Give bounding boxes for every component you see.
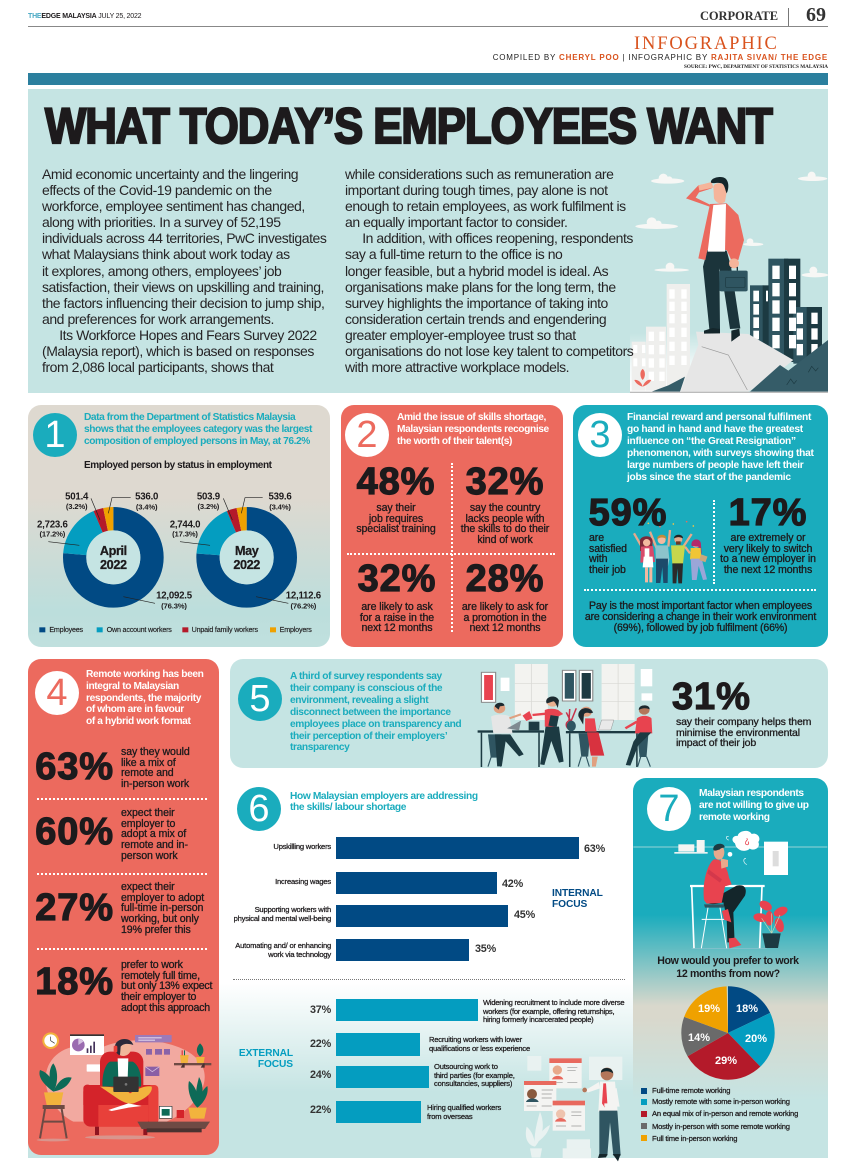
intro text column 2: organisations do not lose key talent to competitors bbox=[345, 343, 633, 359]
stat 48% text: job requires bbox=[369, 513, 423, 525]
bar: supporting workers bbox=[336, 905, 508, 927]
intro text column 2: greater employer-employee trust so that bbox=[345, 327, 576, 343]
panel 5 heading: disconnect between the importance bbox=[290, 707, 451, 718]
number badge 4: 4 bbox=[46, 672, 68, 714]
pie chart: 18% bbox=[736, 1003, 758, 1015]
intro text column 2: In addition, with offices reopening, respondents bbox=[362, 230, 633, 246]
pie legend: Mostly in-person with some remote working bbox=[652, 1122, 790, 1131]
donut charts with labels and legend: (17.3%) bbox=[172, 530, 198, 539]
intro text column 2: consideration certain trends and engendering bbox=[345, 311, 606, 327]
intro text column 1: from 2,086 local participants, shows that bbox=[42, 359, 273, 375]
panel 2: skills shortage bbox=[341, 405, 563, 647]
donut charts with labels and legend: (3.4%) bbox=[269, 503, 291, 512]
panel 7 heading: are not willing to give up bbox=[699, 800, 809, 811]
panel 1: employment status bbox=[28, 405, 330, 647]
bar: increasing wages bbox=[336, 872, 497, 894]
donut charts with labels and legend: 503.9 bbox=[197, 491, 221, 502]
bar: overseas bbox=[336, 1101, 421, 1123]
pie chart bbox=[681, 986, 775, 1080]
label: external focus bbox=[239, 1048, 293, 1070]
panel 4 heading: integral to Malaysian bbox=[86, 681, 179, 692]
label: internal focus: INTERNAL bbox=[552, 888, 603, 899]
legend bbox=[39, 626, 312, 634]
panel 5 heading bbox=[290, 671, 461, 753]
illustration: man thinking on stool bbox=[633, 830, 828, 948]
stat 59% text bbox=[588, 532, 627, 576]
intro text column 2: survey highlights the importance of taking into bbox=[345, 295, 608, 311]
stat 63% text: say they would bbox=[121, 746, 190, 758]
number badge 4 bbox=[35, 671, 79, 715]
stat 17% text: the next 12 months bbox=[724, 564, 812, 576]
stat 31% text: minimise the environmental bbox=[676, 727, 800, 739]
bar chart: internal focus: 45% bbox=[514, 909, 535, 921]
stat 48% text: specialist training bbox=[356, 523, 436, 535]
stat: 63%: 63% bbox=[35, 746, 114, 788]
intro text column 2: organisations make plans for the long term, the bbox=[345, 279, 616, 295]
stat: 31%: 31% bbox=[672, 676, 751, 718]
panel 5 heading: their company is conscious of the bbox=[290, 683, 442, 694]
stat 32% raise text bbox=[360, 601, 434, 634]
intro text column 1: it explores, among others, employees’ job bbox=[42, 263, 281, 279]
stat 27% text: full-time in-person bbox=[121, 902, 203, 914]
stat 17% text: very likely to switch bbox=[724, 543, 812, 555]
donut charts with labels and legend bbox=[37, 491, 322, 634]
panel 3 heading: Financial reward and personal fulfilment bbox=[627, 412, 811, 423]
donut charts with labels and legend: 2022 bbox=[233, 558, 260, 572]
bar chart: external focus: 22% bbox=[310, 1104, 331, 1116]
stat 60% text: expect their bbox=[121, 807, 175, 819]
stat 48% text bbox=[356, 502, 436, 535]
intro text column 1: satisfaction, their views on upskilling and training, bbox=[42, 279, 324, 295]
panel 3 heading: phenomenon, with surveys showing that bbox=[627, 448, 814, 459]
stat 28% text: are likely to ask for bbox=[462, 601, 548, 613]
stat 59% text: their job bbox=[589, 564, 626, 576]
stat 27% text: expect their bbox=[121, 881, 175, 893]
donut charts with labels and legend: 2022 bbox=[100, 558, 127, 572]
panel 4: remote working bbox=[28, 659, 219, 1155]
masthead: publication line: THEEDGE MALAYSIA JULY 25, 2022 bbox=[28, 13, 141, 20]
title: WHAT TODAY’S EMPLOYEES WANT bbox=[45, 98, 772, 154]
illustration: cheering colleagues bbox=[633, 520, 708, 584]
label: internal focus bbox=[552, 888, 603, 910]
stat 31% text: impact of their job bbox=[676, 737, 756, 749]
panel 3 heading: large numbers of people have left their bbox=[627, 460, 803, 471]
stat 18% text bbox=[121, 959, 212, 1014]
legend: Own account workers bbox=[107, 626, 172, 634]
stat 17% text: to a new employer in bbox=[720, 553, 816, 565]
bar chart: external focus: 24% bbox=[310, 1069, 331, 1081]
panel 6 heading bbox=[290, 791, 478, 813]
stat 63% text: in-person work bbox=[121, 778, 189, 790]
stat 28% text: next 12 months bbox=[469, 622, 541, 634]
panel 7 question: How would you prefer to work bbox=[657, 955, 799, 967]
stat 31% text: say their company helps them bbox=[676, 716, 811, 728]
credits line: COMPILED BY CHERYL POO | INFOGRAPHIC BY RAJITA SIVAN/ THE EDGE bbox=[493, 53, 828, 62]
stat 32% raise text: for a raise in the bbox=[360, 612, 434, 624]
panel 1 heading bbox=[84, 412, 312, 447]
donut charts with labels and legend: 12,112.6 bbox=[286, 590, 322, 601]
intro text column 1: Amid economic uncertainty and the lingering bbox=[42, 166, 298, 182]
panel 4 heading: Remote working has been bbox=[86, 669, 204, 680]
stat 32% raise text: next 12 months bbox=[361, 622, 433, 634]
illustration: office team at desks bbox=[478, 664, 652, 767]
stat 32% country text: lacks people with bbox=[466, 513, 544, 525]
donut charts with labels and legend: 536.0 bbox=[135, 491, 158, 502]
panel 2 heading: the worth of their talent(s) bbox=[397, 436, 512, 447]
intro text column 1: (Malaysia report), which is based on responses bbox=[42, 343, 314, 359]
chart subtitle: Employed person by status in employment bbox=[84, 460, 272, 471]
stat 32% country text: say the country bbox=[470, 502, 540, 514]
panel 7 heading: remote working bbox=[699, 812, 770, 823]
intro text column 1: effects of the Covid-19 pandemic on the bbox=[42, 182, 272, 198]
bar chart: internal focus: 42% bbox=[502, 878, 523, 890]
panel 3 heading bbox=[626, 412, 814, 483]
bar chart: internal focus: work via technology bbox=[268, 950, 331, 959]
donut charts with labels and legend: (3.4%) bbox=[136, 503, 158, 512]
illustration: businessman on a rock overlooking city bbox=[630, 172, 828, 393]
panel 3 footer text: are considering a change in their work environment bbox=[585, 611, 816, 623]
bar chart: internal focus: 35% bbox=[475, 943, 496, 955]
number badge 5 bbox=[238, 677, 282, 721]
panel 2 heading: Amid the issue of skills shortage, bbox=[397, 412, 546, 423]
stat: 48%: 48% bbox=[357, 461, 435, 503]
pie legend bbox=[641, 1086, 798, 1143]
bar: automating bbox=[336, 939, 469, 961]
number badge 6 bbox=[237, 787, 281, 831]
bar chart: external focus: Outsourcing work to bbox=[434, 1062, 498, 1071]
panel 3 footer text bbox=[585, 600, 816, 634]
donut charts with labels and legend: April bbox=[100, 544, 127, 558]
bar chart: external focus: third parties (for example, bbox=[434, 1071, 515, 1080]
panel 2 heading: Malaysian respondents recognise bbox=[397, 424, 549, 435]
number badge 2 bbox=[345, 413, 389, 457]
stat 27% text: employer to adopt bbox=[121, 892, 204, 904]
intro text column 2: longer feasible, but a hybrid model is ideal. As bbox=[345, 263, 608, 279]
panel: background gradient behind lower section bbox=[28, 770, 828, 1158]
stat 32% country text: the skills to do their bbox=[461, 523, 549, 535]
stat 63% text: remote and bbox=[121, 767, 174, 779]
pie legend: An equal mix of in-person and remote working bbox=[652, 1109, 798, 1118]
label: internal focus: FOCUS bbox=[552, 899, 587, 910]
donut: May 2022 bbox=[208, 519, 285, 596]
intro text column 1: the factors influencing their decision to jump ship, bbox=[42, 295, 324, 311]
donut charts with labels and legend: 2,723.6 bbox=[37, 519, 68, 530]
number badge 2: 2 bbox=[356, 414, 378, 456]
bar: outsourcing bbox=[336, 1066, 429, 1088]
stat: 59%: 59% bbox=[589, 492, 667, 534]
intro text column 2: enough to retain employees, as work fulfilment is bbox=[345, 198, 626, 214]
bar chart: internal focus: Supporting workers with bbox=[255, 905, 331, 914]
bar chart: internal focus: Automating and/ or enhancing bbox=[235, 941, 331, 950]
stat 59% text: with bbox=[589, 553, 607, 565]
intro text column 1: along with priorities. In a survey of 52,195 bbox=[42, 214, 281, 230]
stat 27% text bbox=[120, 881, 204, 936]
pie legend: Full-time remote working bbox=[652, 1086, 730, 1095]
stat 59% text: satisfied bbox=[589, 543, 627, 555]
stat 17% text bbox=[720, 532, 816, 576]
source line: SOURCE: PWC, DEPARTMENT OF STATISTICS MALAYSIA bbox=[684, 64, 828, 70]
panel 5 heading: their perception of their employers’ bbox=[290, 731, 447, 742]
panel 4 heading: respondents, the majority bbox=[86, 693, 201, 704]
panel 3 heading: go hand in hand and have the greatest bbox=[627, 424, 803, 435]
intro text column 2: say a full-time return to the office is no bbox=[345, 246, 562, 262]
panel 3: great resignation bbox=[573, 405, 828, 647]
stat: 32% raise: 32% bbox=[358, 558, 436, 600]
bar chart: external focus: workers (for example, offering returnships, bbox=[483, 1007, 614, 1016]
intro text column 1: Its Workforce Hopes and Fears Survey 2022 bbox=[59, 327, 317, 343]
bar chart: internal focus: physical and mental well-being bbox=[234, 914, 331, 923]
panel 3 footer text: Pay is the most important factor when employees bbox=[589, 600, 812, 612]
legend: Unpaid family workers bbox=[192, 626, 258, 634]
number badge 3: 3 bbox=[589, 414, 611, 456]
intro text column 2 bbox=[345, 166, 634, 375]
stat 60% text: adopt a mix of bbox=[121, 828, 186, 840]
bar: widening recruitment bbox=[336, 999, 478, 1021]
stat 18% text: but only 13% expect bbox=[121, 980, 212, 992]
panel 3 heading: influence on “the Great Resignation” bbox=[627, 436, 796, 447]
panel 6 heading: the skills/ labour shortage bbox=[290, 802, 406, 813]
intro text column 1: what Malaysians think about work today as bbox=[42, 246, 290, 262]
stat 18% text: prefer to work bbox=[121, 959, 183, 971]
panel 5 heading: environment, revealing a slight bbox=[290, 695, 428, 706]
panel 6 heading: How Malaysian employers are addressing bbox=[290, 791, 478, 802]
pie legend: Full time in-person working bbox=[652, 1134, 737, 1143]
panel 1 heading: shows that the employees category was the largest bbox=[84, 424, 312, 435]
donut charts with labels and legend: (76.2%) bbox=[291, 602, 317, 611]
bar chart: external focus: consultancies, suppliers) bbox=[434, 1079, 512, 1088]
intro text column 1: workforce, employee sentiment has changed, bbox=[42, 198, 305, 214]
bar chart: internal focus: 63% bbox=[584, 843, 605, 855]
teal header bar bbox=[28, 73, 828, 85]
bar chart: external focus: Widening recruitment to include more diverse bbox=[483, 998, 624, 1007]
stat 60% text: employer to bbox=[121, 818, 175, 830]
stat 63% text: like a mix of bbox=[121, 757, 176, 769]
bar chart: internal focus: Increasing wages bbox=[275, 877, 331, 886]
donut charts with labels and legend: (17.2%) bbox=[40, 530, 66, 539]
pie chart: 14% bbox=[688, 1032, 710, 1044]
stat 60% text: person work bbox=[121, 850, 178, 862]
donut: April 2022 bbox=[75, 519, 152, 596]
panel 5 heading: transparency bbox=[290, 742, 349, 753]
stat 17% text: are extremely or bbox=[731, 532, 805, 544]
donut charts with labels and legend: (76.3%) bbox=[161, 602, 187, 611]
panel 7 question: 12 months from now? bbox=[676, 968, 780, 980]
stat: 28%: 28% bbox=[466, 558, 544, 600]
stat 32% raise text: are likely to ask bbox=[361, 601, 433, 613]
bar: upskilling workers bbox=[336, 837, 579, 859]
donut charts with labels and legend: 12,092.5 bbox=[156, 590, 193, 601]
panel 2 heading bbox=[397, 412, 549, 447]
stat 59% text: are bbox=[589, 532, 604, 544]
donut charts with labels and legend: 539.6 bbox=[268, 491, 292, 502]
pie chart: 29% bbox=[715, 1055, 737, 1067]
panel 7 heading bbox=[699, 788, 809, 823]
label: external focus: EXTERNAL bbox=[239, 1048, 293, 1059]
stat 31% text bbox=[676, 716, 811, 749]
donut charts with labels and legend: (3.2%) bbox=[66, 502, 88, 511]
intro text column 1: individuals across 44 territories, PwC investigates bbox=[42, 230, 326, 246]
stat 60% text: remote and in- bbox=[121, 839, 188, 851]
intro text column 1 bbox=[42, 166, 326, 375]
intro text column 2: important during tough times, pay alone is not bbox=[345, 182, 608, 198]
masthead: section name: CORPORATE bbox=[700, 9, 778, 23]
donut charts with labels and legend: (3.2%) bbox=[198, 502, 220, 511]
stat: 27%: 27% bbox=[35, 887, 114, 929]
bar chart: external focus: 22% bbox=[310, 1038, 331, 1050]
legend: Employees bbox=[49, 626, 84, 634]
panel 7 heading: Malaysian respondents bbox=[699, 788, 804, 799]
stat 18% text: their employer to bbox=[121, 991, 196, 1003]
stat 60% text bbox=[121, 807, 188, 862]
intro text column 1: and preferences for work arrangements. bbox=[42, 311, 274, 327]
stat: 17%: 17% bbox=[729, 492, 807, 534]
pie chart: 19% bbox=[698, 1003, 720, 1015]
stat 18% text: remotely full time, bbox=[121, 970, 200, 982]
bar chart: external focus: Recruiting workers with lower bbox=[429, 1035, 522, 1044]
stat 48% text: say their bbox=[376, 502, 416, 514]
stat 28% text: a promotion in the bbox=[463, 612, 546, 624]
masthead: page number: 69 bbox=[806, 4, 826, 26]
stat: 60%: 60% bbox=[35, 811, 114, 853]
illustration: woman working remotely in armchair bbox=[37, 1032, 212, 1142]
panel 7 question bbox=[657, 955, 799, 980]
panel 5: environmental transparency bbox=[230, 659, 828, 768]
intro text column 2: an equally important factor to consider. bbox=[345, 214, 567, 230]
number badge 1: 1 bbox=[44, 414, 66, 456]
number badge 5: 5 bbox=[249, 678, 271, 720]
infographic kicker: INFOGRAPHIC bbox=[634, 34, 779, 54]
stat 63% text bbox=[121, 746, 190, 790]
donut charts with labels and legend: 501.4 bbox=[65, 491, 89, 502]
bar: lower qualifications bbox=[336, 1033, 420, 1056]
bar values: external: 37% bbox=[310, 1004, 331, 1016]
stat 32% country text bbox=[460, 502, 550, 546]
intro text column 2: while considerations such as remuneration are bbox=[345, 166, 613, 182]
intro text column 2: with more attractive workplace models. bbox=[345, 359, 569, 375]
panel 3 heading: jobs since the start of the pandemic bbox=[627, 472, 791, 483]
number badge 6: 6 bbox=[248, 788, 270, 830]
panel 5 heading: A third of survey respondents say bbox=[290, 671, 442, 682]
bar chart: external focus: hiring formerly incarcerated people) bbox=[483, 1015, 593, 1024]
panel: intro bbox=[28, 89, 828, 393]
panel 4 heading bbox=[86, 669, 204, 727]
panel 5 heading: employees place on transparency and bbox=[290, 719, 461, 730]
number badge 7 bbox=[647, 787, 691, 831]
bar chart: internal focus bbox=[234, 837, 605, 961]
stat: 18%: 18% bbox=[35, 961, 114, 1003]
stat 32% country text: kind of work bbox=[477, 534, 533, 546]
panel 7: remote preference bbox=[633, 778, 828, 1158]
stat 28% text bbox=[462, 601, 548, 634]
bar chart: external focus: qualifications or less experience bbox=[429, 1044, 530, 1053]
number badge 7: 7 bbox=[658, 788, 680, 830]
panel 4 heading: of whom are in favour bbox=[86, 704, 184, 715]
illustration: manager reviewing candidate profiles bbox=[524, 1056, 622, 1162]
bar chart: external focus: from overseas bbox=[427, 1112, 473, 1121]
bar chart: external focus: Hiring qualified workers bbox=[427, 1103, 501, 1112]
panel 4 heading: of a hybrid work format bbox=[86, 716, 190, 727]
pie legend: Mostly remote with some in-person working bbox=[652, 1097, 790, 1106]
bar labels: internal: Upskilling workers bbox=[273, 842, 331, 851]
donut charts with labels and legend: 2,744.0 bbox=[170, 519, 200, 530]
stat 18% text: adopt this approach bbox=[121, 1002, 210, 1014]
panel 3 footer text: (69%), followed by job fulfilment (66%) bbox=[614, 622, 787, 634]
label: external focus: FOCUS bbox=[258, 1059, 293, 1070]
donut charts with labels and legend: May bbox=[235, 544, 259, 558]
panel 1 heading: Data from the Department of Statistics Malaysia bbox=[84, 412, 295, 423]
pie chart: 20% bbox=[745, 1033, 767, 1045]
number badge 1 bbox=[33, 413, 77, 457]
stat 27% text: working, but only bbox=[121, 913, 199, 925]
panel 1 heading: composition of employed persons in May, at 76.2% bbox=[84, 436, 310, 447]
number badge 3 bbox=[578, 413, 622, 457]
bar chart: external focus bbox=[310, 998, 624, 1123]
stat: 32% country: 32% bbox=[466, 461, 544, 503]
stat 27% text: 19% prefer this bbox=[121, 924, 191, 936]
legend: Employers bbox=[280, 626, 312, 634]
